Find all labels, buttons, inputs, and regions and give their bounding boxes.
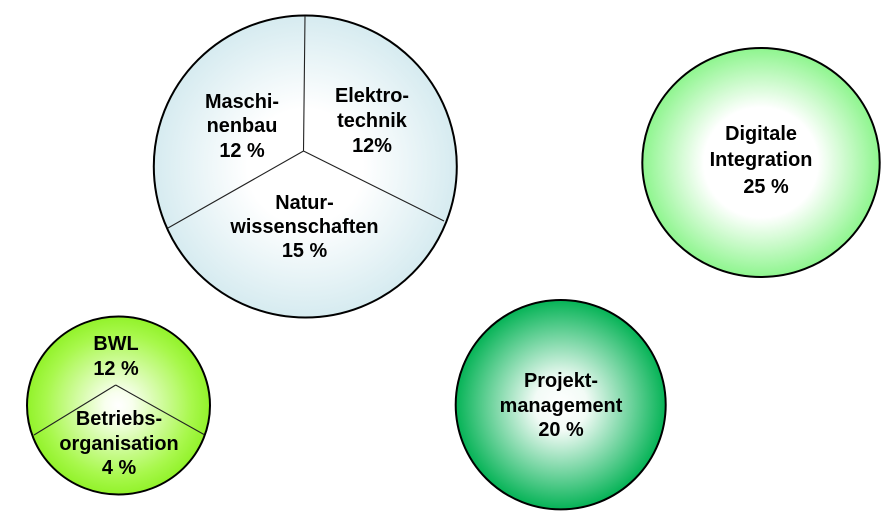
panel: BWL and Betriebsorganisation circle	[27, 316, 210, 494]
label: Maschinenbau 12 %: Maschi-	[205, 91, 279, 113]
label: Maschinenbau 12 %: 12 %	[219, 140, 265, 162]
label: Digitale Integration 25 %: 25 %	[743, 176, 789, 198]
label: BWL 12 %: BWL	[93, 333, 139, 355]
circle background: engineering and sciences	[154, 16, 457, 318]
label: Elektrotechnik 12%: 12%	[352, 135, 392, 157]
label: Betriebsorganisation 4 %: Betriebs-	[76, 408, 162, 430]
label: Elektrotechnik 12%: technik	[337, 110, 408, 132]
label: Digitale Integration 25 %: Integration	[710, 149, 812, 171]
label: Naturwissenschaften 15 %: Natur-	[275, 192, 334, 214]
segment dividers: three sectors	[168, 16, 444, 228]
panel: Digitale Integration circle	[642, 48, 880, 277]
label: Elektrotechnik 12%: Elektro-	[335, 85, 409, 107]
label: Maschinenbau 12 %: nenbau	[207, 115, 277, 137]
circle background: business topics	[27, 316, 210, 494]
segment dividers: two sectors	[34, 385, 204, 435]
label: Betriebsorganisation 4 %: 4 %	[102, 457, 136, 479]
label: Betriebsorganisation 4 %: organisation	[59, 433, 179, 455]
label: Projektmanagement 20 %: Projekt-	[524, 370, 598, 392]
label: Naturwissenschaften 15 %: 15 %	[282, 240, 327, 262]
circle background: Digitale Integration	[642, 48, 880, 277]
label: Projektmanagement 20 %: management	[500, 395, 623, 417]
label: Naturwissenschaften 15 %: wissenschaften	[229, 216, 379, 238]
label: BWL 12 %: 12 %	[93, 358, 139, 380]
circle background: Projektmanagement	[456, 300, 666, 509]
panel: Maschinenbau, Elektrotechnik, Naturwissenschaften circle	[154, 16, 457, 318]
label: Projektmanagement 20 %: 20 %	[538, 419, 584, 441]
panel: Projektmanagement circle	[456, 300, 666, 509]
label: Digitale Integration 25 %: Digitale	[725, 123, 797, 145]
